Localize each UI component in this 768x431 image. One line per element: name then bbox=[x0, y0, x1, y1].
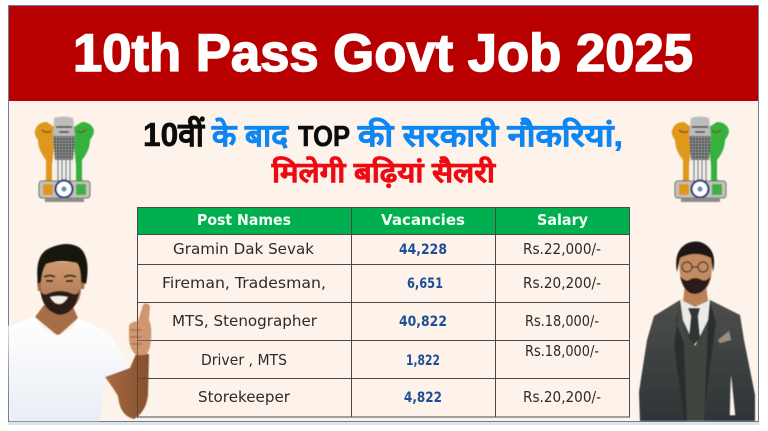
row: Storekeeper bbox=[198, 388, 601, 406]
heading: Hindi headline line one bbox=[143, 115, 623, 153]
row: Driver, MTS: Rs.18,000/- bbox=[525, 342, 599, 360]
suit man: pocket square bbox=[718, 331, 731, 343]
suit man: suit jacket bbox=[639, 300, 755, 421]
row: MTS, Stenographer: MTS, Stenographer bbox=[172, 312, 318, 330]
man: raised arm bbox=[105, 354, 149, 419]
man: face bbox=[41, 262, 81, 314]
row: MTS, Stenographer: 40,822 bbox=[399, 314, 447, 330]
header banner bbox=[9, 6, 758, 101]
row: Driver, MTS bbox=[201, 342, 599, 369]
table lines showing through the raised arm bbox=[137, 302, 152, 418]
row: Gramin Dak Sevak bbox=[173, 240, 601, 258]
row: Fireman, Tradesman: Rs.20,200/- bbox=[523, 274, 601, 292]
table header row: Post Names bbox=[197, 211, 291, 229]
row: Gramin Dak Sevak: Gramin Dak Sevak bbox=[173, 240, 314, 258]
man: eyes and brows bbox=[44, 276, 76, 277]
heading: Hindi headline line one: के बाद bbox=[211, 117, 290, 153]
suit man: tie bbox=[688, 308, 700, 345]
row: Driver, MTS: Driver , MTS bbox=[201, 351, 287, 369]
title: 10th Pass Govt Job 2025 bbox=[73, 24, 693, 83]
row: MTS, Stenographer bbox=[172, 312, 599, 330]
row: Storekeeper: Storekeeper bbox=[198, 388, 291, 406]
illustration: smiling man with thumbs up bbox=[8, 244, 151, 421]
man: smile bbox=[50, 296, 68, 304]
heading: Hindi headline line one: 10वीं bbox=[143, 115, 205, 153]
illustration: man in grey suit bbox=[639, 242, 755, 421]
suit man: neck bbox=[683, 285, 708, 307]
row: Fireman, Tradesman bbox=[162, 274, 601, 292]
suit man: glasses bbox=[682, 262, 708, 272]
heading: Hindi headline line one: TOP bbox=[298, 121, 350, 153]
heading: Hindi headline line two: मिलेगी बढ़ियां सैलरी bbox=[271, 156, 497, 188]
suit man: face bbox=[679, 252, 712, 293]
suit man: beard bbox=[680, 276, 711, 294]
icon: national emblem left bbox=[35, 116, 94, 202]
suit man: gap beside arm bbox=[730, 375, 735, 415]
man: beard bbox=[40, 288, 80, 315]
suit man: white shirt bbox=[680, 298, 710, 346]
suit man: waistcoat bbox=[683, 322, 708, 421]
man: ears bbox=[37, 278, 85, 291]
row: Driver, MTS: 1,822 bbox=[406, 353, 440, 369]
table header row bbox=[137, 207, 629, 234]
row: Fireman, Tradesman: Fireman, Tradesman, bbox=[162, 274, 326, 292]
row: Gramin Dak Sevak: 44,228 bbox=[399, 242, 447, 258]
row: Gramin Dak Sevak: Rs.22,000/- bbox=[523, 240, 601, 258]
man: hair bbox=[37, 244, 88, 284]
row: MTS, Stenographer: Rs.18,000/- bbox=[525, 312, 599, 330]
heading: Hindi headline line one: की सरकारी नौकरियां, bbox=[357, 117, 623, 153]
man: left arm under shirt bbox=[10, 375, 22, 421]
row: Fireman, Tradesman: 6,651 bbox=[407, 276, 443, 292]
man: white t-shirt bbox=[8, 317, 128, 421]
row: Storekeeper: Rs.20,200/- bbox=[523, 388, 601, 406]
row: Storekeeper: 4,822 bbox=[404, 390, 442, 406]
table: posts, vacancies and salary bbox=[137, 207, 630, 417]
suit man: hair bbox=[676, 242, 714, 272]
man: eyes bbox=[46, 280, 73, 282]
man: neck bbox=[35, 305, 78, 336]
icon: national emblem right bbox=[672, 116, 729, 202]
table header row: Vacancies bbox=[381, 211, 465, 229]
table header row: Salary bbox=[537, 211, 588, 229]
man: thumbs-up hand bbox=[129, 303, 151, 355]
suit man: lapels bbox=[674, 302, 716, 420]
panel bottom shadow bbox=[8, 422, 759, 425]
